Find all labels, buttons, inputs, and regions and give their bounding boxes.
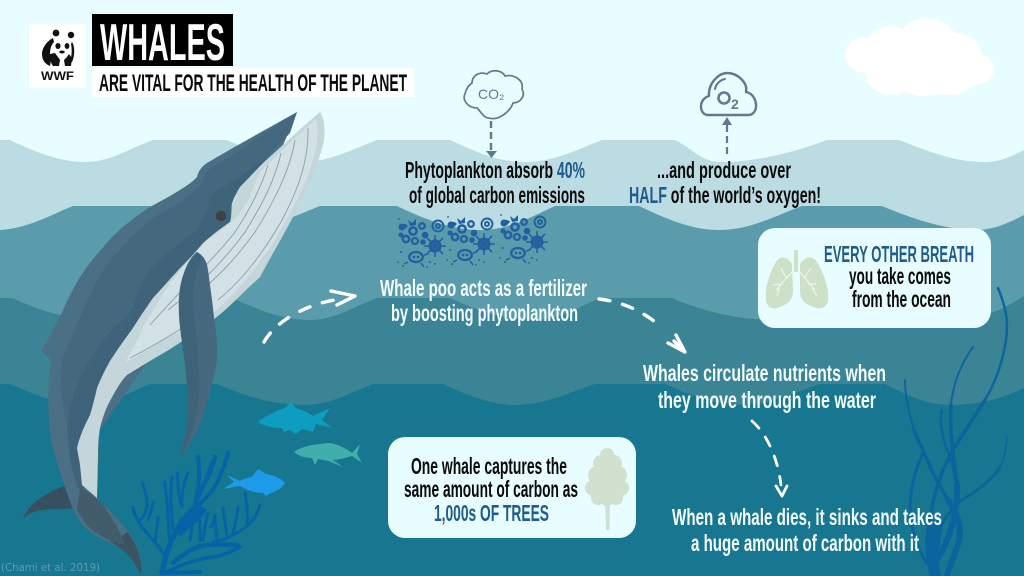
ocean wave layer 2 <box>0 206 1024 576</box>
ocean wave layer 4 <box>0 384 1024 576</box>
fish: green tuna <box>294 443 362 467</box>
whale flipper shade <box>179 252 203 458</box>
panel: tree comparison <box>388 437 636 538</box>
arrow: fertilizer to circulate <box>599 299 685 352</box>
whale pleats panel <box>125 119 318 363</box>
whale head shade <box>61 112 297 440</box>
text: one whale captures: One whale captures the <box>411 453 567 479</box>
whale dotted flank <box>68 157 267 490</box>
citation: (Chami et al. 2019) <box>1 561 100 574</box>
arrow: whale to fertilizer <box>264 291 355 342</box>
icon: lungs <box>766 250 828 308</box>
WHALES heading: WHALES <box>100 14 225 72</box>
fish: blue carp <box>258 402 332 434</box>
text: thousands of trees: 1,000s OF TREES <box>434 500 549 526</box>
whale tail tip <box>110 532 141 575</box>
cloud <box>845 18 994 96</box>
whale throat and belly <box>77 112 324 498</box>
whale body <box>41 112 297 575</box>
text: whales circulate: Whales circulate nutrients when <box>643 360 886 386</box>
text: from the ocean: from the ocean <box>852 286 951 312</box>
icon: O2 cloud with arrow <box>701 73 756 155</box>
text: global carbon emissions: of global carbon emissions <box>409 182 585 208</box>
icon: CO2 cloud with arrow: CO₂ <box>478 86 504 102</box>
icon: phytoplankton clusters <box>397 214 548 268</box>
WHALES heading <box>92 14 233 72</box>
text: whale poo fertilizer: Whale poo acts as a fertilizer <box>380 275 587 301</box>
text: you take comes: you take comes <box>849 263 951 289</box>
text: move through water: they move through the water <box>658 387 876 413</box>
text: boosting phytoplankton: by boosting phytoplankton <box>391 300 578 326</box>
icon: O2 cloud with arrow: 2 <box>731 96 739 112</box>
subtitle: ARE VITAL FOR THE HEALTH OF THE PLANET <box>99 70 407 97</box>
text: same amount of carbon: same amount of carbon as <box>404 476 578 502</box>
text: half of oxygen: HALF of the world’s oxygen! <box>629 182 821 208</box>
WWF logo <box>29 24 86 88</box>
whale left fluke <box>23 486 76 518</box>
text: phytoplankton absorb: Phytoplankton absorb 40% <box>405 157 585 183</box>
panda <box>42 30 74 66</box>
subtitle <box>92 68 414 97</box>
arrow: circulate to sinking <box>752 421 787 496</box>
whale pleat lines <box>130 128 308 358</box>
whale <box>23 112 324 575</box>
ocean wave layer 3 <box>0 296 1024 576</box>
whale right fluke <box>77 488 125 545</box>
whale eye <box>216 211 226 221</box>
WWF wordmark: WWF <box>41 69 74 83</box>
panel: every other breath <box>758 228 991 328</box>
icon: CO2 cloud with arrow <box>464 71 523 158</box>
whale flipper <box>179 252 217 458</box>
ocean wave layer 1 <box>0 140 1024 576</box>
icon: tree <box>585 448 629 530</box>
text: produce over: ...and produce over <box>657 157 791 183</box>
coral <box>133 453 260 573</box>
fish: blue fish <box>223 469 285 496</box>
seaweed right <box>905 288 1007 576</box>
title block <box>29 14 414 97</box>
